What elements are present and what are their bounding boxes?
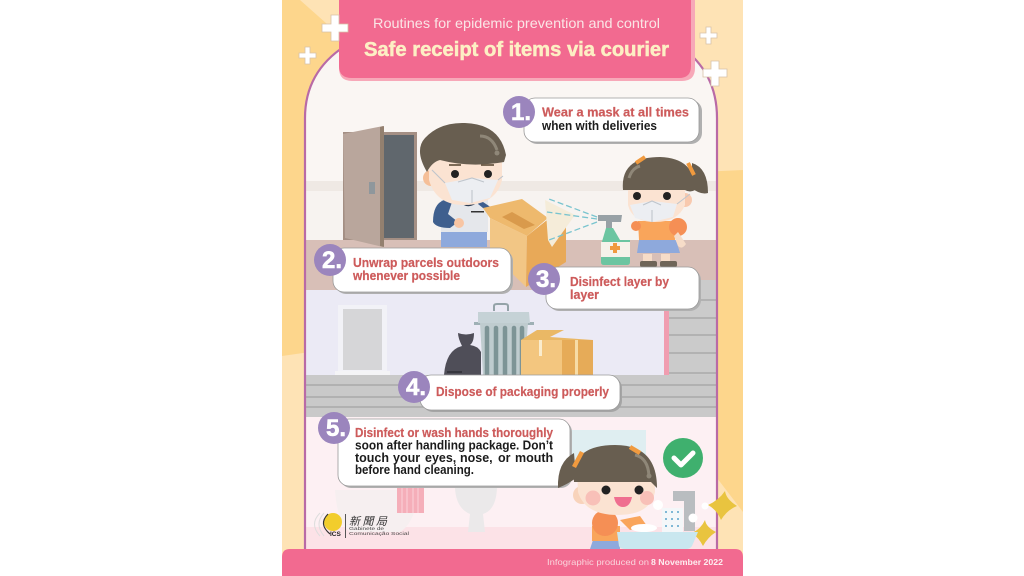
wash basin [617, 532, 698, 549]
step 3 callout: layer [570, 288, 599, 302]
step 5 callout: nose, [460, 451, 493, 465]
step 3 callout: Disinfect layer by [570, 275, 669, 289]
girl body [590, 510, 657, 549]
logo: Government Information Bureau [314, 513, 409, 538]
logo: Government Information Bureau: Gabinete de [349, 526, 385, 531]
step 2 callout [314, 244, 513, 294]
step 5 callout [318, 412, 572, 488]
step 2 callout: Unwrap parcels outdoors [353, 256, 499, 270]
step 4 callout: 4. [406, 374, 426, 401]
upstairs wall and floor [305, 181, 717, 290]
icon: yellow sparkles [692, 491, 737, 546]
step 4 callout [398, 371, 622, 412]
step 5 callout: or [498, 451, 511, 465]
step 2 callout: 2. [322, 247, 342, 274]
footer bar: Infographic produced on [547, 557, 649, 567]
garbage bag [444, 333, 481, 375]
step 2 callout: whenever possible [352, 269, 460, 283]
header banner [339, 0, 695, 81]
step 5 callout: mouth [515, 451, 553, 465]
infographic poster [282, 0, 743, 576]
icon: decorative plus signs [299, 15, 727, 86]
step 4 callout: Dispose of packaging properly [436, 385, 609, 399]
logo: Government Information Bureau: ICS [330, 531, 342, 538]
step 5 callout: soon after handling package. Don’t [355, 438, 554, 452]
bathroom girl washing hands [558, 445, 708, 549]
boy body [433, 200, 492, 247]
step 1 callout [503, 96, 702, 144]
footer bar [282, 549, 743, 576]
logo: Government Information Bureau: 新聞局 [349, 515, 388, 528]
icon: green check badge [663, 438, 703, 478]
background [282, 0, 743, 576]
step 3 callout: 3. [536, 266, 556, 293]
cardboard box by bin [521, 330, 593, 375]
grey steps [305, 375, 717, 417]
step 1 callout: 1. [511, 99, 531, 126]
step 5 callout: before hand cleaning. [355, 463, 474, 477]
outdoor lavender section [306, 290, 669, 375]
faucet [653, 491, 708, 532]
illustrated arch panel [305, 46, 717, 549]
disinfectant spray mist [545, 199, 597, 247]
logo: Government Information Bureau: Comunicação Social [349, 531, 409, 536]
girl head [558, 445, 657, 515]
title: Safe receipt of items via courier [364, 39, 669, 61]
step 3 callout [528, 263, 701, 311]
girl with mask [623, 157, 708, 267]
spray bottle [598, 215, 630, 265]
bathroom section [306, 430, 716, 549]
footer bar: 8 November 2022 [651, 557, 723, 567]
step 5 callout: Disinfect or wash hands thoroughly [355, 426, 553, 440]
step 1 callout: when with deliveries [541, 119, 657, 133]
door [343, 126, 417, 247]
step 1 callout: Wear a mask at all times [542, 106, 689, 120]
step 5 callout: touch [355, 451, 389, 465]
boy with mask [420, 123, 506, 247]
step 5 callout: eyes, [425, 451, 456, 465]
step 5 callout: 5. [326, 415, 346, 442]
grey stairs right [669, 280, 717, 375]
subtitle: Routines for epidemic prevention and control [373, 15, 660, 31]
step 5 callout: your [393, 451, 420, 465]
trash can [474, 304, 534, 375]
boy head [420, 123, 506, 205]
open cardboard box [483, 199, 566, 287]
